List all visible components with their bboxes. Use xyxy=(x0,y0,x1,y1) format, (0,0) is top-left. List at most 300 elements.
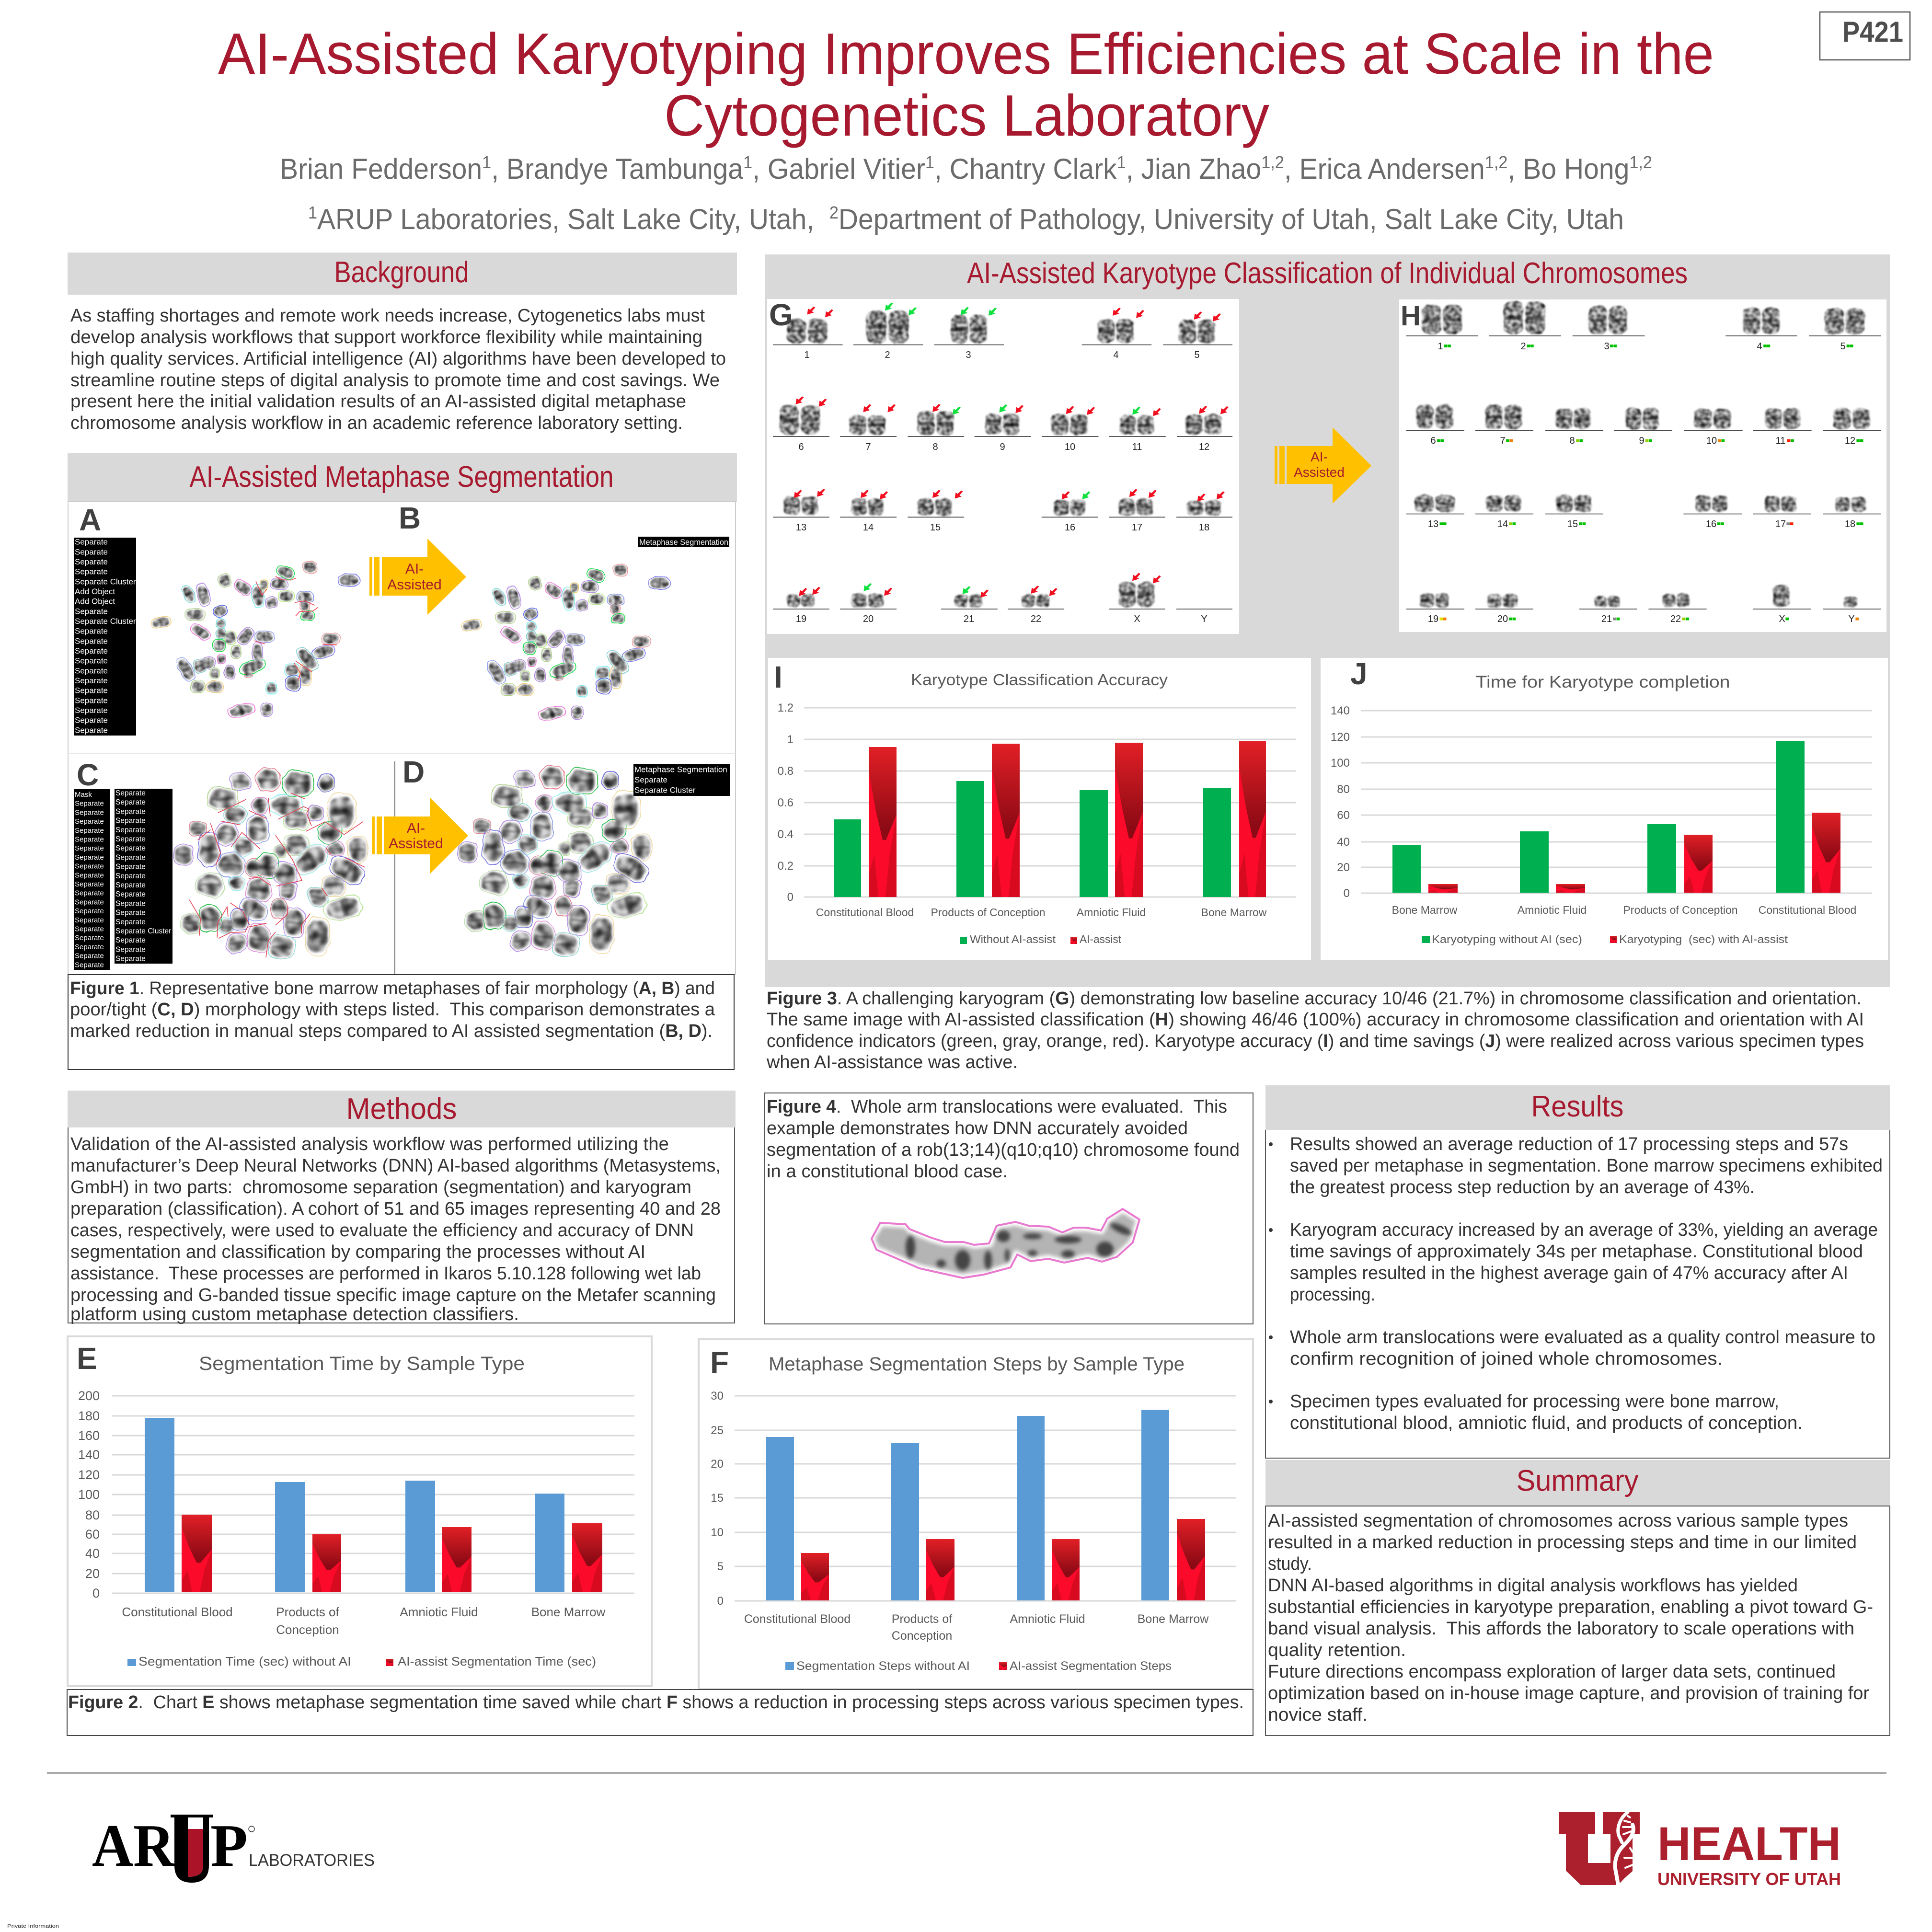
axis labels F: 30 xyxy=(711,1390,724,1403)
figure 4 caption: in a constitutional blood case. xyxy=(767,1162,1008,1182)
text block: background: chromosome analysis workflow in an academic reference laboratory setting. xyxy=(70,413,683,433)
axis labels E: 40 xyxy=(85,1546,100,1561)
heading: background: Background xyxy=(334,256,469,289)
arrow: AI-assisted A to B xyxy=(369,539,466,615)
title: AI-Assisted Karyotyping Improves Efficiencies at Scale in the xyxy=(218,21,1714,86)
legend J: Karyotyping without AI (sec) xyxy=(1432,933,1582,945)
text block: summary: DNN AI-based algorithms in digital analysis workflows has yielded xyxy=(1268,1576,1798,1596)
step list A: Add Object xyxy=(75,587,115,596)
step list A: Separate xyxy=(75,725,108,735)
categories F: Bone Marrow xyxy=(1138,1612,1209,1626)
logo: ARUP Laboratories: P xyxy=(210,1813,248,1879)
label C: C xyxy=(77,758,99,792)
categories E: Constitutional Blood xyxy=(122,1605,233,1619)
chromosome numbers G xyxy=(796,350,1209,624)
step list C: Separate xyxy=(75,916,104,924)
legend F: AI-assist Segmentation Steps xyxy=(1010,1659,1172,1673)
categories J: Bone Marrow xyxy=(1392,904,1458,916)
chromosome numbers G: 11 xyxy=(1132,442,1142,452)
label D: D xyxy=(402,755,425,789)
chromosome numbers H: 17 xyxy=(1775,519,1786,529)
bullet: whole arm translocations xyxy=(1269,1327,1875,1369)
categories F: Amniotic Fluid xyxy=(1010,1612,1085,1626)
bullet: whole arm translocations: confirm recognition of joined whole chromosomes. xyxy=(1290,1349,1723,1369)
axis labels E: 60 xyxy=(85,1527,100,1541)
figure 4 caption xyxy=(767,1097,1240,1182)
step list C: Separate xyxy=(75,808,104,816)
step list C: Separate xyxy=(75,800,104,808)
arrow: AI-assisted C to D: AI- xyxy=(407,820,425,836)
axis labels E: 160 xyxy=(78,1428,100,1443)
heading: results xyxy=(1265,1085,1890,1130)
chromosome numbers H: 3 xyxy=(1604,341,1610,352)
step list A: Add Object xyxy=(75,597,115,606)
chromosome numbers H: 11 xyxy=(1776,436,1785,446)
text block: methods: Validation of the AI-assisted analysis workflow was performed utilizing the xyxy=(70,1134,669,1154)
step list A: Separate xyxy=(75,696,108,705)
authors: 1 xyxy=(925,152,934,172)
categories J: Constitutional Blood xyxy=(1759,904,1856,916)
axis labels F: 5 xyxy=(717,1560,724,1573)
axis labels E: 80 xyxy=(85,1508,100,1522)
bars I xyxy=(834,741,1266,897)
label B: B xyxy=(399,501,421,535)
logo: ARUP Laboratories: LABORATORIES xyxy=(249,1851,375,1870)
chromosome numbers G: 6 xyxy=(798,442,804,452)
axis labels F: 20 xyxy=(711,1458,724,1471)
bullet: karyogram accuracy: time savings of approximately 34s per metaphase. Constitutional blood xyxy=(1290,1242,1863,1262)
bars J xyxy=(1392,741,1840,893)
step list C: Separate xyxy=(115,835,146,843)
logo: University of Utah Health: UNIVERSITY OF UTAH xyxy=(1657,1869,1841,1889)
step list C: Separate xyxy=(75,817,104,826)
axis labels I: 0 xyxy=(787,891,794,904)
figure 2 caption: Figure 2. Chart E shows metaphase segmentation time saved while chart F shows a reduction in processing steps across various specimen types. xyxy=(68,1692,1244,1713)
step list A: Separate xyxy=(75,706,108,715)
axis labels I: 0.4 xyxy=(778,828,794,841)
axis labels J: 120 xyxy=(1331,731,1350,744)
categories E: Conception xyxy=(276,1622,339,1637)
step list D: Separate Cluster xyxy=(634,786,696,794)
step list A: Separate xyxy=(75,557,108,566)
step list C: Separate Cluster xyxy=(115,927,171,935)
legend E: AI-assist Segmentation Time (sec) xyxy=(398,1654,596,1668)
categories E: Bone Marrow xyxy=(531,1605,606,1619)
authors: 1 xyxy=(482,152,491,172)
text block: methods xyxy=(70,1134,721,1324)
step list A: Separate xyxy=(75,716,108,725)
heading: summary xyxy=(1265,1460,1890,1506)
step list C: Separate xyxy=(115,918,146,926)
arrow: AI-assisted G to H: AI- xyxy=(1311,449,1328,464)
chromosome numbers G: Y xyxy=(1201,614,1208,624)
figure 3 caption: confidence indicators (green, gray, orange, red). Karyotype accuracy (I) and time savings (J) were realized across various specimen types xyxy=(767,1031,1864,1051)
categories I: Bone Marrow xyxy=(1201,906,1267,919)
axis labels I: 1.2 xyxy=(778,702,794,714)
figure 2 caption xyxy=(67,1690,1253,1736)
categories E xyxy=(122,1605,606,1637)
chromosome numbers H: 13 xyxy=(1428,519,1438,529)
heading: summary: Summary xyxy=(1516,1464,1639,1497)
chromosome numbers H: 22 xyxy=(1670,614,1681,624)
authors: 1 xyxy=(1117,152,1126,172)
axis labels E xyxy=(78,1389,100,1600)
legend I: Without AI-assist xyxy=(970,933,1056,945)
step list C: Separate xyxy=(75,827,104,835)
panel: background xyxy=(68,253,737,433)
step list C: Separate xyxy=(75,880,104,888)
chromosome numbers G: 7 xyxy=(865,442,871,452)
figure 1 caption xyxy=(68,975,734,1070)
step list A xyxy=(74,538,136,736)
figure 3 caption: Figure 3. A challenging karyogram (G) demonstrating low baseline accuracy 10/46 (21.7%) in chromosome classification and orientation. xyxy=(767,989,1862,1009)
text block: summary: AI-assisted segmentation of chromosomes across various sample types xyxy=(1268,1511,1848,1531)
authors: , Gabriel Vitier xyxy=(752,153,925,185)
figure 4 caption: Figure 4. Whole arm translocations were evaluated. This xyxy=(767,1097,1227,1117)
label A: A xyxy=(79,503,101,537)
step list C: Separate xyxy=(115,945,146,954)
bullet: steps and time: saved per metaphase in segmentation. Bone marrow specimens exhibited xyxy=(1290,1156,1883,1176)
step list C: Separate xyxy=(115,899,146,908)
step list C: Separate xyxy=(75,943,104,951)
chromosome numbers H: 2 xyxy=(1520,341,1526,352)
axis labels J: 140 xyxy=(1331,704,1350,717)
affiliations: 2 xyxy=(829,203,839,222)
text block: summary: quality retention. xyxy=(1268,1640,1406,1660)
chromosome numbers G: X xyxy=(1134,614,1140,624)
categories I: Constitutional Blood xyxy=(816,906,914,919)
heading: results: Results xyxy=(1531,1090,1623,1123)
panel: methods xyxy=(68,1091,736,1324)
step list C: Separate xyxy=(115,909,146,917)
arrow: AI-assisted G to H: Assisted xyxy=(1294,465,1345,480)
categories I xyxy=(816,906,1267,919)
axis labels I: 0.8 xyxy=(778,765,794,778)
logo: University of Utah Health xyxy=(1559,1812,1841,1889)
authors: , Chantry Clark xyxy=(934,153,1117,185)
text block: background: high quality services. Artificial intelligence (AI) algorithms have been developed to xyxy=(70,349,726,369)
chromosome numbers G: 3 xyxy=(966,350,971,360)
arrow: AI-assisted G to H xyxy=(1275,427,1371,504)
chromosome numbers H: 6 xyxy=(1430,436,1436,446)
heading: metaphase segmentation: AI-Assisted Metaphase Segmentation xyxy=(190,460,613,494)
bullet: steps and time xyxy=(1269,1134,1883,1197)
chromosome numbers H: 14 xyxy=(1497,519,1508,529)
step list C: Separate xyxy=(75,952,104,960)
axis labels F: 25 xyxy=(711,1424,724,1437)
chromosome numbers H: 18 xyxy=(1845,519,1855,529)
red and green arrows G xyxy=(794,303,1229,598)
categories F: Constitutional Blood xyxy=(744,1612,851,1626)
step list A: Separate xyxy=(75,538,108,547)
chromosome numbers G: 15 xyxy=(930,522,941,533)
figure 3 caption xyxy=(766,989,1864,1072)
authors: , Erica Andersen xyxy=(1284,153,1485,185)
logo: University of Utah Health: HEALTH xyxy=(1657,1817,1841,1870)
categories F xyxy=(744,1612,1209,1643)
step list C: Separate xyxy=(75,853,104,862)
arrow: AI-assisted A to B: Assisted xyxy=(387,577,442,593)
chromosome numbers G: 9 xyxy=(1000,442,1005,452)
chromosome numbers H: 10 xyxy=(1706,436,1717,446)
arrow: AI-assisted C to D xyxy=(372,797,468,874)
axis labels J: 100 xyxy=(1331,757,1350,770)
authors: 1,2 xyxy=(1261,152,1284,172)
bullet: specimen types: Specimen types evaluated for processing were bone marrow, xyxy=(1290,1392,1779,1412)
chromosome numbers H xyxy=(1428,341,1855,624)
axis labels E: 140 xyxy=(78,1448,100,1462)
step list A: Separate Cluster xyxy=(75,617,136,626)
chart title F: Metaphase Segmentation Steps by Sample Type xyxy=(769,1354,1184,1375)
axis labels I xyxy=(778,702,794,904)
step list C: Separate xyxy=(75,871,104,879)
chromosome numbers H: 4 xyxy=(1757,341,1762,352)
axis labels J: 0 xyxy=(1344,887,1350,900)
arrow: AI-assisted C to D: Assisted xyxy=(389,836,443,851)
karyogram G xyxy=(767,298,1239,634)
text block: summary: optimization based on in-house image capture, and provision of training for xyxy=(1268,1683,1869,1703)
step list C: Separate xyxy=(75,934,104,942)
arrow: AI-assisted A to B: AI- xyxy=(405,561,424,577)
legend E xyxy=(127,1654,596,1668)
poster number: P421 xyxy=(1842,16,1903,48)
bullet: steps and time: Results showed an average reduction of 17 processing steps and 57s xyxy=(1290,1134,1848,1154)
chromosome numbers G: 2 xyxy=(885,350,890,360)
chromosome numbers H: 8 xyxy=(1569,436,1575,446)
chromosome numbers H: 19 xyxy=(1428,614,1438,624)
axis labels E: 0 xyxy=(92,1586,100,1600)
affiliations: 1 xyxy=(308,203,317,222)
chromosome numbers H: 12 xyxy=(1845,436,1855,446)
step list B: Metaphase Segmentation xyxy=(639,538,728,547)
chromosome numbers H: 9 xyxy=(1639,436,1644,446)
categories E: Products of xyxy=(276,1605,340,1619)
chromosome pairs G xyxy=(780,310,1221,607)
chromosome numbers G: 8 xyxy=(932,442,938,452)
text block: methods: segmentation and classification by comparing the processes without AI xyxy=(70,1242,645,1262)
authors: , Bo Hong xyxy=(1507,153,1629,185)
chromosome numbers G: 22 xyxy=(1031,614,1041,624)
heading: methods: Methods xyxy=(346,1092,457,1126)
text block: methods: processing and G-banded tissue specific image capture on the Metafer scanning xyxy=(70,1285,716,1305)
bullet: specimen types xyxy=(1269,1392,1803,1433)
axis labels F: 0 xyxy=(717,1595,724,1608)
robertsonian translocation chromosome xyxy=(872,1209,1139,1278)
bullet: karyogram accuracy: processing. xyxy=(1290,1285,1375,1305)
categories E: Amniotic Fluid xyxy=(400,1605,478,1619)
legend J xyxy=(1422,933,1788,945)
step list C: Separate xyxy=(115,826,146,834)
text block: methods: platform using custom metaphase detection classifiers. xyxy=(70,1304,519,1324)
bullet: specimen types: constitutional blood, amniotic fluid, and products of conception. xyxy=(1290,1413,1803,1433)
chromosome numbers H: Y xyxy=(1848,614,1855,624)
heading: karyotype classification: AI-Assisted Karyotype Classification of Individual Chromosomes xyxy=(967,257,1688,290)
footer note: Private Information xyxy=(7,1924,59,1929)
metaphase image B xyxy=(461,564,670,722)
label I: I xyxy=(774,660,782,694)
bullet: whole arm translocations: Whole arm translocations were evaluated as a quality control measure to xyxy=(1290,1327,1875,1347)
text block: background: streamline routine steps of digital analysis to promote time and cost savings. We xyxy=(70,370,720,391)
figure 1 caption: poor/tight (C, D) morphology with steps listed. This comparison demonstrates a xyxy=(70,1000,715,1020)
text block: background: develop analysis workflows that support workforce flexibility while maintaining xyxy=(70,327,702,347)
step list D: Metaphase Segmentation xyxy=(634,765,727,774)
heading: background xyxy=(68,253,737,295)
chart title E: Segmentation Time by Sample Type xyxy=(199,1353,525,1374)
chromosome numbers G: 16 xyxy=(1065,522,1075,533)
chromosome numbers G: 19 xyxy=(796,614,806,624)
logo: ARUP Laboratories: AR xyxy=(92,1813,175,1879)
affiliations: Department of Pathology, University of Utah, Salt Lake City, Utah xyxy=(839,203,1624,235)
panel: summary xyxy=(1265,1460,1890,1736)
step list A: Separate Cluster xyxy=(75,577,136,586)
text block: methods: assistance. These processes are performed in Ikaros 5.10.128 following wet lab xyxy=(70,1264,701,1284)
step list C: Separate xyxy=(75,898,104,906)
metaphase image A xyxy=(150,561,360,719)
axis labels I: 0.2 xyxy=(778,860,794,873)
chart title I: Karyotype Classification Accuracy xyxy=(911,671,1168,689)
step list A: Separate xyxy=(75,686,108,695)
step list C: Separate xyxy=(115,936,146,944)
authors: , Jian Zhao xyxy=(1126,153,1261,185)
metaphase image D xyxy=(458,766,652,956)
legend I: AI-assist xyxy=(1080,933,1122,945)
step list C: Separate xyxy=(75,862,104,871)
text block: summary: band visual analysis. This affords the laboratory to scale operations with xyxy=(1268,1619,1854,1639)
chromosome numbers G: 13 xyxy=(796,522,806,533)
step list C: Separate xyxy=(115,817,146,825)
text block: summary: Future directions encompass exploration of larger data sets, continued xyxy=(1268,1662,1836,1682)
poster number xyxy=(1820,12,1910,60)
text block: background xyxy=(70,306,726,433)
step list D: Separate xyxy=(634,775,667,784)
axis labels E: 120 xyxy=(78,1468,100,1482)
figure 3 caption: The same image with AI-assisted classification (H) showing 46/46 (100%) accuracy in chromosome classification and orientation with AI xyxy=(767,1010,1864,1030)
step list C: Separate xyxy=(75,925,104,933)
legend F: Segmentation Steps without AI xyxy=(796,1659,970,1673)
chromosome numbers H: X xyxy=(1779,614,1785,624)
bar chart F: segmentation steps xyxy=(699,1339,1253,1689)
axis labels J xyxy=(1331,704,1350,900)
text block: methods: manufacturer’s Deep Neural Networks (DNN) AI-based algorithms (Metasystems, xyxy=(70,1156,721,1176)
chromosome numbers G: 4 xyxy=(1113,350,1119,360)
figure 4 caption: segmentation of a rob(13;14)(q10;q10) chromosome found xyxy=(767,1140,1240,1160)
text block: methods: cases, respectively, were used to evaluate the efficiency and accuracy of DNN xyxy=(70,1220,694,1241)
categories J: Amniotic Fluid xyxy=(1518,904,1587,916)
axis labels F: 10 xyxy=(711,1526,724,1539)
affiliations: ARUP Laboratories, Salt Lake City, Utah, xyxy=(317,203,829,235)
chromosome numbers H: 21 xyxy=(1601,614,1612,624)
figure 1 caption: marked reduction in manual steps compared to AI assisted segmentation (B, D). xyxy=(70,1021,713,1041)
chromosome numbers H: 7 xyxy=(1500,436,1506,446)
chromosome pairs H xyxy=(1414,301,1870,608)
axis labels E: 200 xyxy=(78,1389,100,1403)
categories I: Amniotic Fluid xyxy=(1077,906,1146,919)
categories J xyxy=(1392,904,1856,916)
text block: methods: preparation (classification). A cohort of 51 and 65 images representing 40 and 28 xyxy=(70,1199,721,1219)
label H: H xyxy=(1401,300,1421,332)
label G: G xyxy=(769,298,793,332)
bar chart E: segmentation time xyxy=(68,1336,652,1686)
step list C: Separate xyxy=(115,872,146,880)
chromosome numbers H: 5 xyxy=(1840,341,1846,352)
chromosome numbers H: 16 xyxy=(1706,519,1716,529)
step list C: Separate xyxy=(115,853,146,862)
axis labels J: 40 xyxy=(1337,836,1350,849)
step list C: Separate xyxy=(115,881,146,889)
authors: Brian Fedderson xyxy=(280,153,493,185)
step list D xyxy=(633,764,730,796)
chromosome numbers G: 18 xyxy=(1199,522,1209,533)
text block: summary: substantial efficiencies in karyotype preparation, enabling a pivot toward G- xyxy=(1268,1597,1873,1617)
confidence indicators H xyxy=(1437,345,1863,620)
authors: 1,2 xyxy=(1629,152,1652,172)
step list C: Separate xyxy=(115,955,146,963)
figure 1 caption: Figure 1. Representative bone marrow metaphases of fair morphology (A, B) and xyxy=(70,978,715,999)
legend J: Karyotyping (sec) with AI-assist xyxy=(1619,933,1788,945)
legend F xyxy=(785,1659,1172,1673)
step list A: Separate xyxy=(75,567,108,576)
chromosome numbers G: 17 xyxy=(1132,522,1142,533)
axis labels J: 20 xyxy=(1337,861,1350,874)
chromosome numbers G: 20 xyxy=(863,614,874,624)
step list C: Separate xyxy=(75,836,104,843)
step list C: Separate xyxy=(75,907,104,915)
axis labels E: 100 xyxy=(78,1487,100,1502)
step list C: Separate xyxy=(115,789,146,797)
heading: methods xyxy=(68,1091,736,1127)
text block: summary: resulted in a marked reduction in processing steps and time in our limited xyxy=(1268,1532,1857,1552)
bar chart J: time for karyotype completion xyxy=(1321,656,1888,960)
metaphase image C xyxy=(174,768,368,959)
step list A: Separate xyxy=(75,646,108,656)
step list A: Separate xyxy=(75,547,108,556)
chromosome numbers G: 5 xyxy=(1194,350,1200,360)
chromosome numbers G: 21 xyxy=(964,614,974,624)
step list C: Separate xyxy=(115,863,146,871)
chromosome numbers H: 15 xyxy=(1567,519,1578,529)
categories F: Conception xyxy=(892,1629,952,1643)
authors: 1 xyxy=(743,152,752,172)
step list C: Separate xyxy=(115,798,146,806)
bullet: karyogram accuracy xyxy=(1269,1220,1878,1305)
text block: background: As staffing shortages and remote work needs increase, Cytogenetics labs must xyxy=(70,306,705,326)
panel: results xyxy=(1265,1085,1890,1458)
step list A: Separate xyxy=(75,666,108,675)
axis labels I: 1 xyxy=(787,733,794,746)
step list C: Separate xyxy=(115,807,146,816)
axis labels I: 0.6 xyxy=(778,796,794,809)
step list C: Separate xyxy=(75,889,104,897)
axis labels E: 180 xyxy=(78,1409,100,1423)
chart title J: Time for Karyotype completion xyxy=(1476,673,1730,691)
karyogram H xyxy=(1399,299,1886,632)
text block: methods: GmbH) in two parts: chromosome separation (segmentation) and karyogram xyxy=(70,1177,691,1197)
authors: 1,2 xyxy=(1485,152,1507,172)
step list C: Separate xyxy=(75,961,104,969)
categories I: Products of Conception xyxy=(931,906,1046,919)
panel: AI-assisted metaphase segmentation xyxy=(68,453,737,975)
label J: J xyxy=(1350,656,1368,691)
bars E xyxy=(145,1418,602,1592)
panel: figure 4 xyxy=(765,1093,1253,1324)
step list A: Separate xyxy=(75,656,108,666)
heading: metaphase segmentation xyxy=(68,453,737,502)
chromosome numbers G: 1 xyxy=(804,350,810,360)
chromosome numbers H: 20 xyxy=(1497,614,1508,624)
chromosome numbers G: 10 xyxy=(1065,442,1075,452)
text block: summary xyxy=(1268,1511,1873,1725)
text block: summary: novice staff. xyxy=(1268,1705,1368,1725)
